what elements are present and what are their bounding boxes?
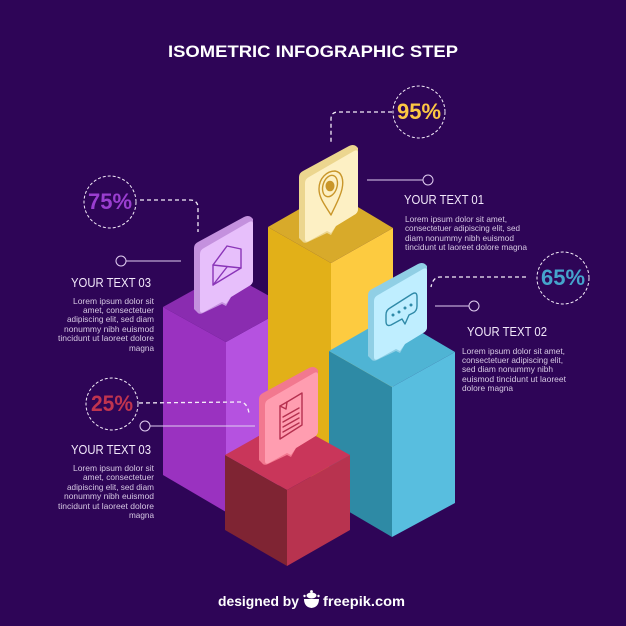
- callout: 65%: 65%: [541, 265, 585, 290]
- text block: your text 03 lower: magna: [129, 510, 154, 520]
- callout: 95%: 95%: [397, 99, 441, 124]
- text block: your text 01: Lorem ipsum dolor sit amet,: [405, 214, 507, 224]
- connector: text 02: [435, 301, 479, 311]
- connector: text 01: [367, 175, 433, 185]
- purple column: [163, 272, 289, 512]
- blue card with chat icon: [368, 263, 427, 361]
- footer credit: [218, 590, 405, 609]
- text block: your text 03 lower: adipiscing elit, sed diam: [67, 482, 154, 492]
- red column: [225, 420, 350, 566]
- text block: your text 01: tincidunt ut laoreet dolore magna: [405, 242, 527, 252]
- text block: your text 02: sed diam nonummy nibh: [462, 364, 553, 374]
- text block: your text 02: [462, 324, 567, 393]
- blue column: [329, 315, 455, 537]
- purple card with envelope icon: [194, 216, 253, 314]
- icon: map pin: [319, 171, 343, 215]
- connector: text 03 lower: [140, 421, 255, 431]
- connector: text 03 upper: [116, 256, 181, 266]
- text block: your text 03 lower: Lorem ipsum dolor sit: [73, 463, 155, 473]
- text block: your text 01: diam nonummy nibh euismod: [405, 233, 514, 243]
- text block: your text 03 upper: [58, 275, 155, 353]
- text block: your text 02: consectetuer adipiscing elit,: [462, 355, 563, 365]
- callout: 25%: 25%: [91, 391, 133, 416]
- text block: your text 03 upper: nonummy nibh euismod: [64, 324, 154, 334]
- footer credit: freepik.com: [323, 593, 405, 609]
- text block: your text 03 upper: amet, consectetuer: [83, 305, 154, 315]
- text block: your text 03 upper: adipiscing elit, sed diam: [67, 314, 154, 324]
- text block: your text 03 lower: amet, consectetuer: [83, 472, 154, 482]
- text block: your text 03 lower: tincidunt ut laoreet dolore: [58, 501, 154, 511]
- footer credit: designed by: [218, 593, 299, 609]
- yellow card with pin icon: [299, 145, 358, 243]
- icon: speech bubble: [386, 293, 417, 326]
- callout: 65%: [431, 252, 589, 304]
- icon: document: [280, 393, 302, 439]
- text block: your text 03 upper: Lorem ipsum dolor sit: [73, 296, 155, 306]
- text block: your text 02: euismod tincidunt ut laoreet: [462, 374, 567, 384]
- text block: your text 01: [404, 192, 527, 252]
- text block: your text 02: Lorem ipsum dolor sit amet,: [462, 346, 565, 356]
- red card with document icon: [259, 367, 318, 465]
- text block: your text 01: consectetuer adipiscing elit, sed: [405, 223, 520, 233]
- yellow column: [268, 191, 393, 480]
- text block: your text 03 upper: tincidunt ut laoreet dolore: [58, 333, 154, 343]
- text block: your text 03 upper: YOUR TEXT 03: [71, 275, 151, 290]
- callout: 95%: [331, 86, 445, 143]
- text block: your text 01: YOUR TEXT 01: [404, 192, 484, 207]
- text block: your text 03 lower: nonummy nibh euismod: [64, 491, 154, 501]
- text block: your text 02: dolore magna: [462, 383, 513, 393]
- title: ISOMETRIC INFOGRAPHIC STEP: [168, 42, 458, 61]
- text block: your text 02: YOUR TEXT 02: [467, 324, 547, 339]
- icon: freepik mascot: [303, 590, 320, 608]
- icon: envelope: [213, 246, 241, 285]
- text block: your text 03 lower: YOUR TEXT 03: [71, 442, 151, 457]
- callout: 75%: [84, 176, 198, 232]
- text block: your text 03 lower: [58, 442, 155, 520]
- text block: your text 03 upper: magna: [129, 343, 154, 353]
- callout: 25%: [86, 378, 249, 430]
- callout: 75%: 75%: [88, 189, 132, 214]
